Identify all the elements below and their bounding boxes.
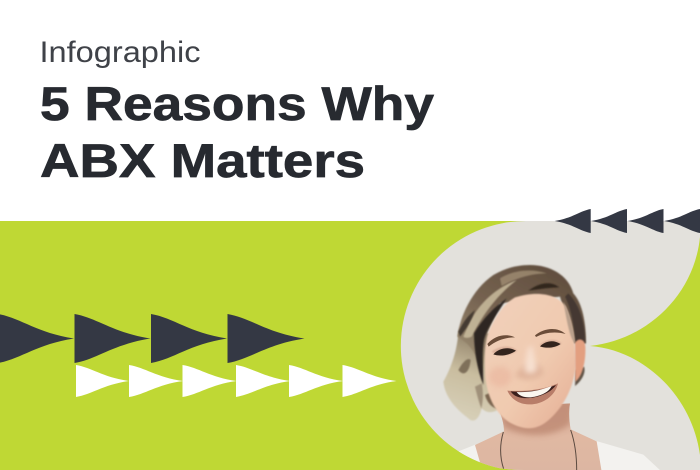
cheek glow [490,367,510,386]
nose shading [515,364,544,379]
upper hair [457,265,586,373]
brown lower strands [484,393,496,409]
eyebrows [487,329,566,347]
beige petal shape [401,221,700,470]
green panel [0,221,700,470]
eyes [493,341,561,355]
shaved side dark [565,293,585,343]
dark fringe [528,283,559,291]
white arrow row [76,365,396,397]
title: 5 Reasons Why [40,77,434,130]
top arrows pointing left [555,209,700,233]
neck and chest [475,404,602,470]
teeth [517,386,552,397]
dark hair near face [474,298,507,385]
mouth [507,383,558,404]
face [485,294,575,428]
blonde lower hair [443,333,502,421]
eye sockets [492,340,562,355]
title [40,77,434,187]
portrait of smiling woman [443,265,662,470]
header background [0,0,700,221]
dark arrow row [0,314,304,363]
light streaks [463,280,517,338]
eyebrow label: Infographic: Infographic [40,36,200,69]
title: ABX Matters [40,134,365,187]
shirt [453,441,662,470]
necklace [501,430,577,470]
ear [575,340,585,382]
temple shading [563,302,575,343]
